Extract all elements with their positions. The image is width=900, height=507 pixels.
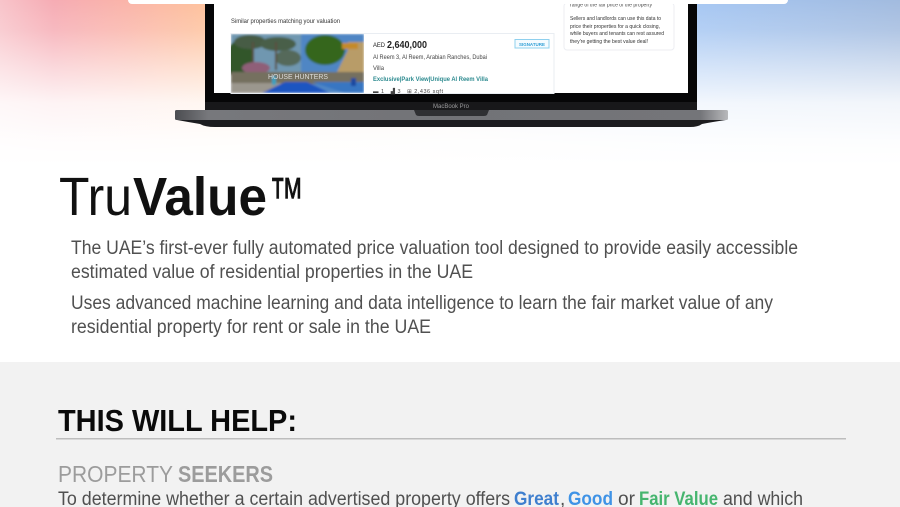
top floating bar (128, 0, 788, 4)
listing location: Al Reem 3, Al Reem, Arabian Ranches, Dubai (373, 55, 487, 61)
signature badge (515, 40, 549, 48)
listing price (373, 40, 427, 51)
title: Tru (59, 167, 132, 227)
listing price: 2,640,000 (387, 40, 427, 51)
listing type: Villa (373, 66, 385, 72)
description line 3: Uses advanced machine learning and data intelligence to learn the fair market value of any (71, 293, 773, 314)
listing link: Exclusive|Park View|Unique Al Reem Villa (373, 77, 489, 83)
laptop display content (214, 2, 688, 95)
valuation note card (564, 2, 674, 50)
title: ™ (269, 167, 304, 227)
subheading: property seekers (58, 461, 273, 487)
valuation note card: price their properties for a quick closing, (570, 24, 660, 30)
description block (71, 238, 798, 338)
subheading: property seekers: SEEKERS (178, 461, 273, 487)
laptop mockup (175, 0, 728, 127)
description line 1: The UAE’s first-ever fully automated price valuation tool designed to provide easily accessible (71, 238, 798, 259)
listing price: AED (373, 42, 385, 49)
similar properties heading: Similar properties matching your valuation (231, 19, 340, 25)
hero background gradient (0, 0, 900, 166)
description line 2: estimated value of residential properties in the UAE (71, 262, 473, 283)
valuation note card: range of the fair price of the property (570, 2, 652, 8)
title: Value (133, 167, 267, 227)
listing specs: ▬ 1 ▟ 3 ⊞ 2,436 sqft (373, 87, 443, 95)
property photo (226, 34, 364, 93)
valuation note card: while buyers and tenants can rest assured (570, 31, 664, 37)
valuation note card: they're getting the best value deal! (570, 39, 648, 45)
laptop brand label: MacBook Pro (433, 103, 469, 110)
title (59, 167, 304, 227)
property seekers description (58, 489, 803, 507)
signature badge: SIGNATURE (519, 42, 546, 48)
section heading: THIS WILL HELP: (58, 403, 297, 438)
subheading: property seekers: PROPERTY (58, 461, 173, 487)
description line 4: residential property for rent or sale in the UAE (71, 317, 431, 338)
panel: this will help (0, 362, 900, 507)
laptop base (175, 110, 728, 127)
property photo: HOUSE HUNTERS (268, 72, 328, 81)
valuation note card: Sellers and landlords can use this data to (570, 16, 661, 22)
property listing card (226, 34, 554, 95)
laptop screen bezel (205, 0, 697, 111)
